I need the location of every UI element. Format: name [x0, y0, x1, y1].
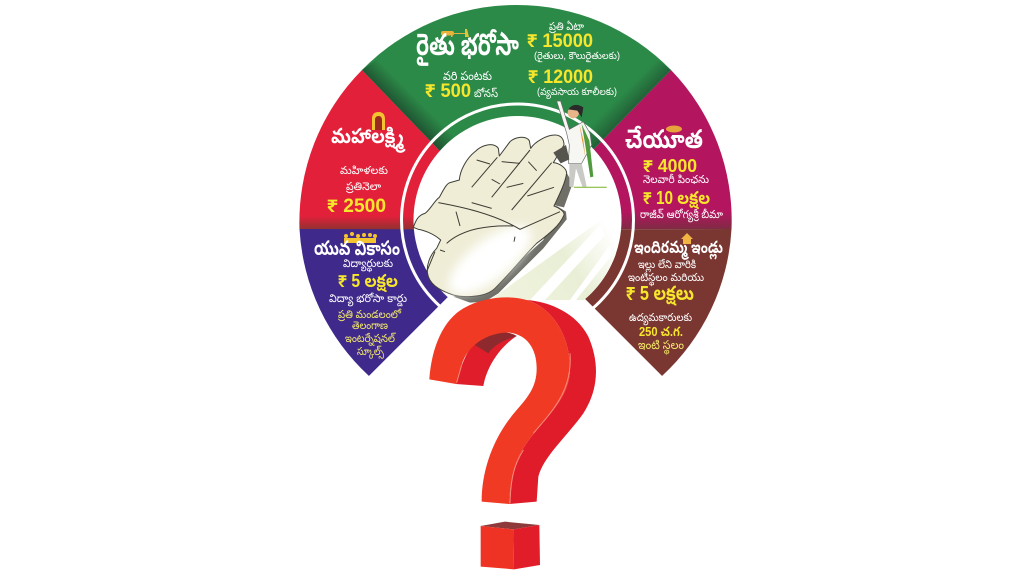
amount: 2500: ₹ 2500: [327, 196, 386, 217]
heading: Indiramma houses: ఇందిరమ్మ ఇండ్లు: [634, 238, 723, 260]
icon: helping hands: [666, 126, 682, 132]
heading: Cheyutha: చేయూత: [625, 124, 703, 154]
palm highlight: [438, 213, 542, 307]
amount: 500: ₹ 500: [425, 80, 471, 102]
white ring: [402, 104, 634, 336]
amount: 5 lakh: ₹ 5 లక్షలు: [626, 283, 694, 306]
heading: Yuva Vikasam: యువ వికాసం: [314, 238, 400, 260]
white bottom wedge: [369, 230, 662, 576]
text: Telangana: తెలంగాణ: [352, 320, 388, 332]
text: for students: విద్యార్థులకు: [343, 258, 393, 273]
icon: woman: [372, 112, 385, 130]
cube top: [481, 522, 539, 529]
text: 250 square yards: 250 చ.గ.: [639, 324, 683, 339]
text: houseless: ఇల్లు లేని వారికి: [638, 258, 696, 273]
edge highlights: [457, 353, 570, 503]
inner top shadow: [475, 332, 517, 353]
hand shadow side: [453, 172, 573, 303]
heading: Rythu Bharosa: రైతు భరోసా: [416, 28, 519, 66]
text: education card: విద్యా భరోసా కార్డు: [329, 292, 407, 307]
text: monthly pension: నెలవారీ పింఛను: [643, 173, 709, 186]
inner curve side: [456, 333, 517, 386]
text: schools: స్కూల్స్: [357, 345, 384, 359]
panel: brown Indiramma housing sector: [516, 229, 732, 376]
finger separation lines: [427, 150, 560, 272]
cube side: [513, 525, 540, 569]
text: bonus: బోనస్: [474, 87, 498, 100]
amount: 12000: ₹ 12000: [528, 66, 593, 88]
icon: house: [681, 233, 693, 244]
figure: leader on the hand: [553, 101, 607, 188]
hand palm and fingers: [413, 135, 567, 297]
text: agricultural labourers: (వ్యవసాయ కూలీలకు): [537, 86, 617, 99]
text: Rajiv Aarogyasri: రాజీవ్ ఆరోగ్యశ్రీ బీమా: [640, 208, 723, 223]
amount: 5 lakh: ₹ 5 లక్షల: [338, 271, 398, 292]
text: for women: మహిళలకు: [340, 165, 388, 177]
mark side face: [509, 300, 596, 504]
white centre disc: [414, 116, 622, 324]
text: for paddy: వరి పంటకు: [443, 69, 492, 83]
panel: red Mahalakshmi sector: [299, 70, 516, 230]
text: house site: ఇంటి స్థలం: [638, 338, 684, 355]
illustration: Congress hand: [413, 101, 607, 307]
text: activists: ఉద్యమకారులకు: [629, 312, 692, 326]
amount: 15000: ₹ 15000: [527, 30, 593, 52]
mark front face: [429, 297, 570, 504]
icon: crowd of students: [344, 232, 377, 243]
panel: magenta Cheyutha sector: [516, 70, 732, 230]
icon: bullocks and plough: [441, 29, 469, 37]
amount: 4000: ₹ 4000: [643, 156, 697, 176]
amount: 10 lakh: ₹ 10 లక్షల: [643, 188, 710, 209]
heading: Mahalakshmi: మహాలక్ష్మి: [331, 125, 406, 153]
text: international: ఇంటర్నేషనల్: [345, 332, 396, 346]
cube front: [481, 526, 514, 569]
illustration: 3D red question mark: [429, 297, 596, 569]
panel: purple Yuva Vikasam sector: [300, 229, 516, 376]
panel: green Rythu Bharosa sector: [362, 5, 671, 229]
text: every mandal: ప్రతి మండలంలో: [338, 308, 402, 322]
text: farmers and tenants: (రైతులు, కౌలురైతులకు): [534, 51, 620, 63]
infographic canvas: [299, 5, 732, 570]
pale green light streaks: [492, 225, 616, 300]
text: every year: ప్రతి ఏటా: [549, 21, 584, 34]
text: house site and: ఇంటిస్థలం మరియు: [628, 272, 704, 287]
text: every month: ప్రతినెలా: [346, 181, 381, 194]
